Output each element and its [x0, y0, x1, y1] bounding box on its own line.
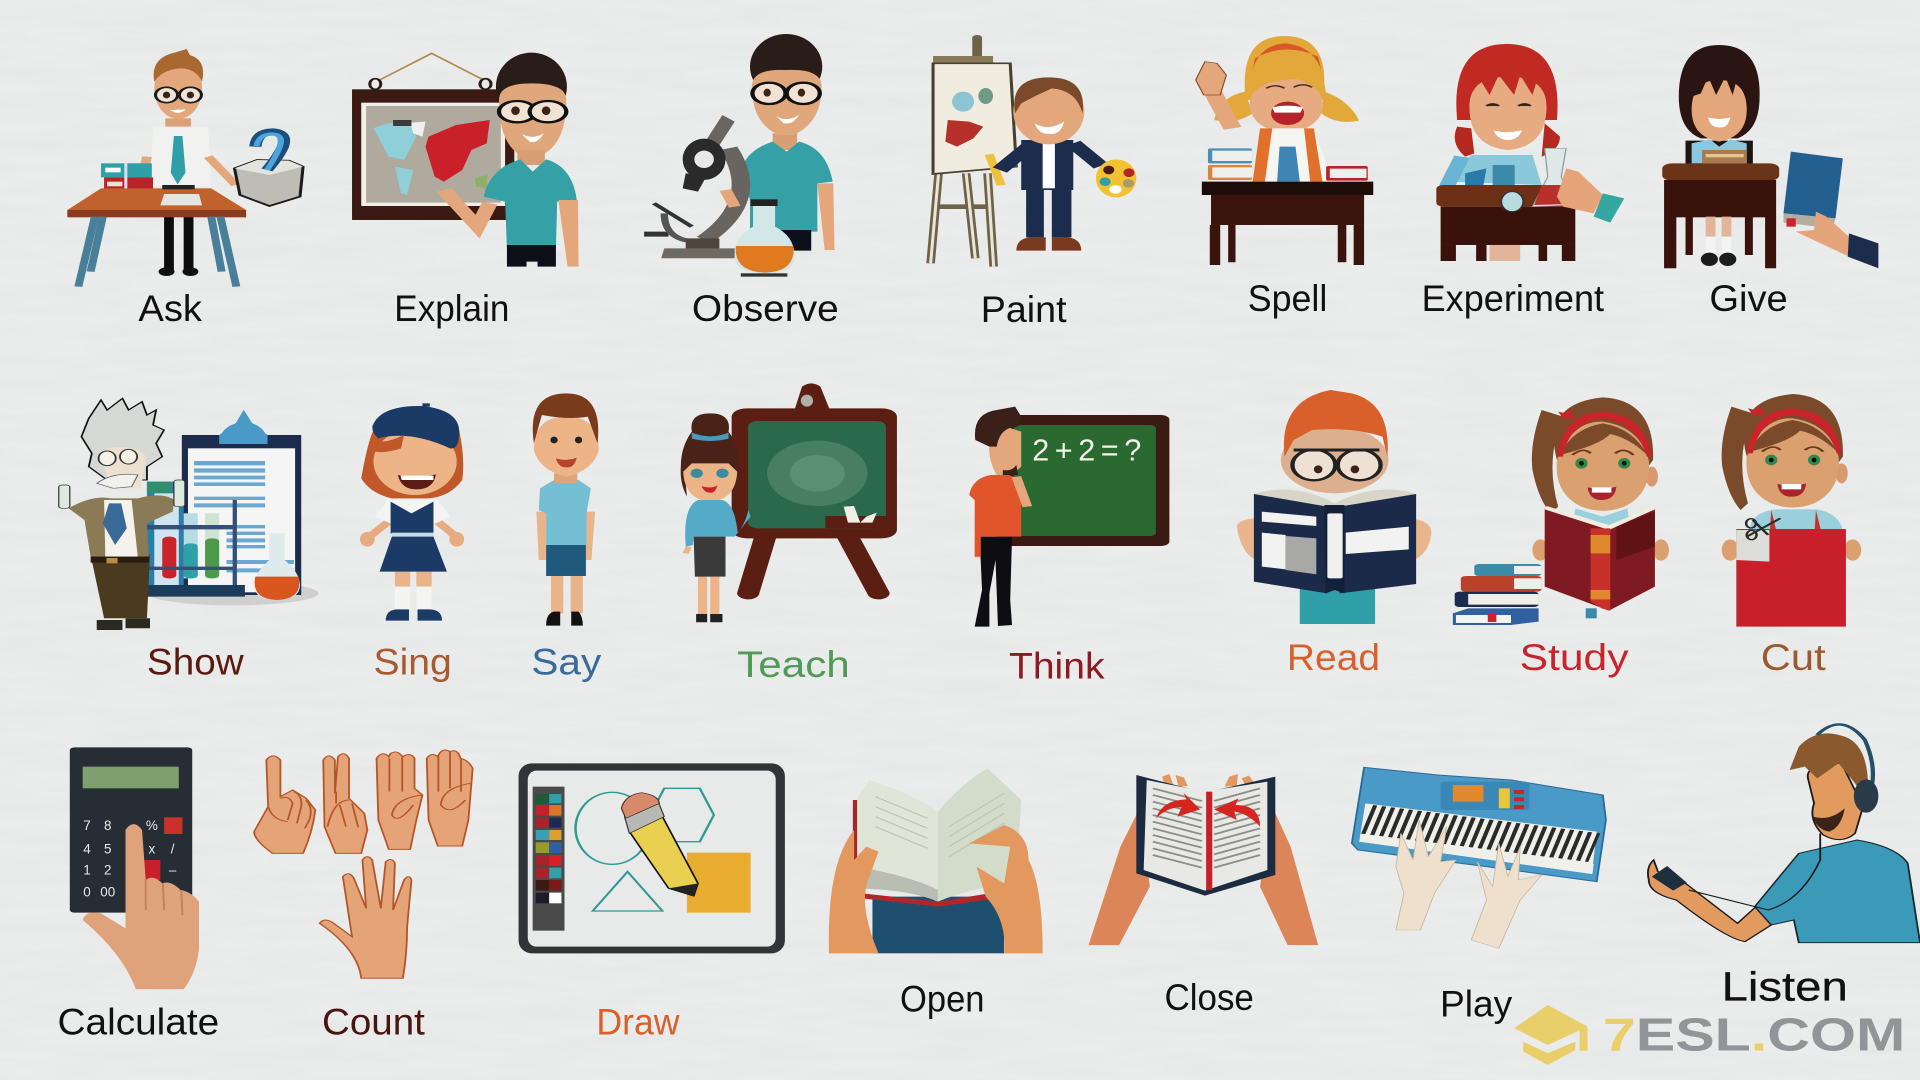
- icon: girl with red book and stack of books: [1453, 397, 1669, 625]
- label: Sing: Sing: [373, 642, 452, 683]
- icon: boy reading navy book: [1237, 390, 1431, 624]
- icon: boy speaking: [533, 393, 599, 626]
- panel: Explain: [352, 53, 579, 329]
- panel: Experiment: [1422, 44, 1624, 319]
- icon: teacher at desk with question box: [67, 49, 303, 287]
- logo: 7ESL.COM watermark: [1514, 1005, 1905, 1065]
- panel: Cut: [1722, 394, 1861, 678]
- icon: drawing tablet with pencil and shapes: [519, 763, 785, 953]
- label: Show: Show: [147, 642, 244, 683]
- formula: 2 + 2 = ?: [1032, 433, 1141, 467]
- panel: Close: [1089, 774, 1318, 1018]
- icon: teacher beside chalkboard: [681, 383, 897, 622]
- label: Say: Say: [531, 642, 602, 683]
- calculator keys: 4: [83, 841, 91, 856]
- label: Count: Count: [322, 1002, 425, 1043]
- panel: Show: [59, 398, 318, 683]
- calculator keys: 5: [104, 841, 111, 856]
- calculator keys: 1: [83, 862, 91, 877]
- label: Cut: Cut: [1761, 637, 1826, 678]
- label: Give: Give: [1709, 278, 1788, 319]
- panel: Think: [969, 407, 1169, 686]
- calculator keys: 00: [100, 884, 115, 899]
- panel: Study: [1453, 397, 1669, 678]
- label: Calculate: Calculate: [58, 1002, 219, 1043]
- panel: Calculate: [58, 747, 219, 1043]
- panel: Sing: [360, 403, 464, 683]
- label: Play: Play: [1440, 983, 1513, 1024]
- icon: young man with headphones and music player: [1648, 724, 1920, 943]
- calculator keys: %: [146, 818, 158, 833]
- label: Read: Read: [1287, 637, 1380, 678]
- icon: boy at easel with palette: [931, 35, 1136, 267]
- label: Explain: Explain: [394, 288, 509, 329]
- panel: Teach: [681, 383, 897, 685]
- panel: Spell: [1196, 36, 1373, 319]
- label: Experiment: Experiment: [1422, 278, 1604, 319]
- icon: man explaining a world map: [352, 53, 579, 267]
- label: Observe: Observe: [692, 288, 839, 329]
- calculator keys: 7: [83, 818, 91, 833]
- icon: girl at desk raising hand: [1196, 36, 1373, 265]
- panel: Count: [254, 750, 473, 1043]
- icon: girl at desk being given a book: [1662, 45, 1878, 268]
- calculator keys: –: [169, 862, 177, 877]
- icon: calculator and pointing hand: [70, 747, 192, 913]
- panel: Listen: [1648, 724, 1920, 1009]
- panel: Paint: [931, 35, 1136, 330]
- label: Study: Study: [1520, 637, 1629, 678]
- icon: hands playing a keyboard: [1352, 767, 1606, 948]
- label: Paint: Paint: [981, 289, 1067, 330]
- panel: Ask: [67, 49, 303, 329]
- label: Ask: Ask: [138, 288, 203, 329]
- panel: Observe: [644, 34, 839, 329]
- icon: man with microscope and flask: [644, 34, 834, 277]
- icon: girl cutting red paper: [1722, 394, 1861, 627]
- panel: Say: [531, 393, 602, 683]
- label: Teach: Teach: [737, 644, 850, 685]
- panel: Draw: [519, 763, 785, 1043]
- icon: girl with flask and hand: [1436, 44, 1624, 261]
- icon: hands closing a book with red arrows: [1089, 774, 1318, 945]
- panel: Give: [1662, 45, 1878, 319]
- label: Think: Think: [1009, 645, 1105, 686]
- label: Listen: Listen: [1722, 963, 1848, 1009]
- icon: counting hands one to five: [254, 750, 473, 978]
- label: Spell: Spell: [1248, 278, 1327, 319]
- calculator keys: 0: [83, 884, 91, 899]
- icon: hands opening a book: [829, 768, 1043, 953]
- label: Draw: Draw: [596, 1002, 680, 1043]
- label: Open: Open: [900, 978, 984, 1019]
- panel: Open: [829, 768, 1043, 1019]
- calculator keys: x: [148, 841, 155, 856]
- panel: Play: [1352, 767, 1606, 1024]
- calculator keys: [83, 818, 177, 899]
- calculator keys: 2: [104, 862, 111, 877]
- label: Close: Close: [1164, 977, 1254, 1018]
- logo: 7ESL.COM watermark: 7ESL .COM: [1603, 1009, 1905, 1061]
- icon: professor with clipboard and test tubes: [59, 398, 318, 630]
- icon: singing girl in navy uniform: [360, 403, 464, 621]
- panel: Read: [1237, 390, 1431, 678]
- calculator keys: /: [171, 841, 175, 856]
- icon: man thinking at chalkboard: [969, 407, 1169, 627]
- calculator keys: 8: [104, 818, 111, 833]
